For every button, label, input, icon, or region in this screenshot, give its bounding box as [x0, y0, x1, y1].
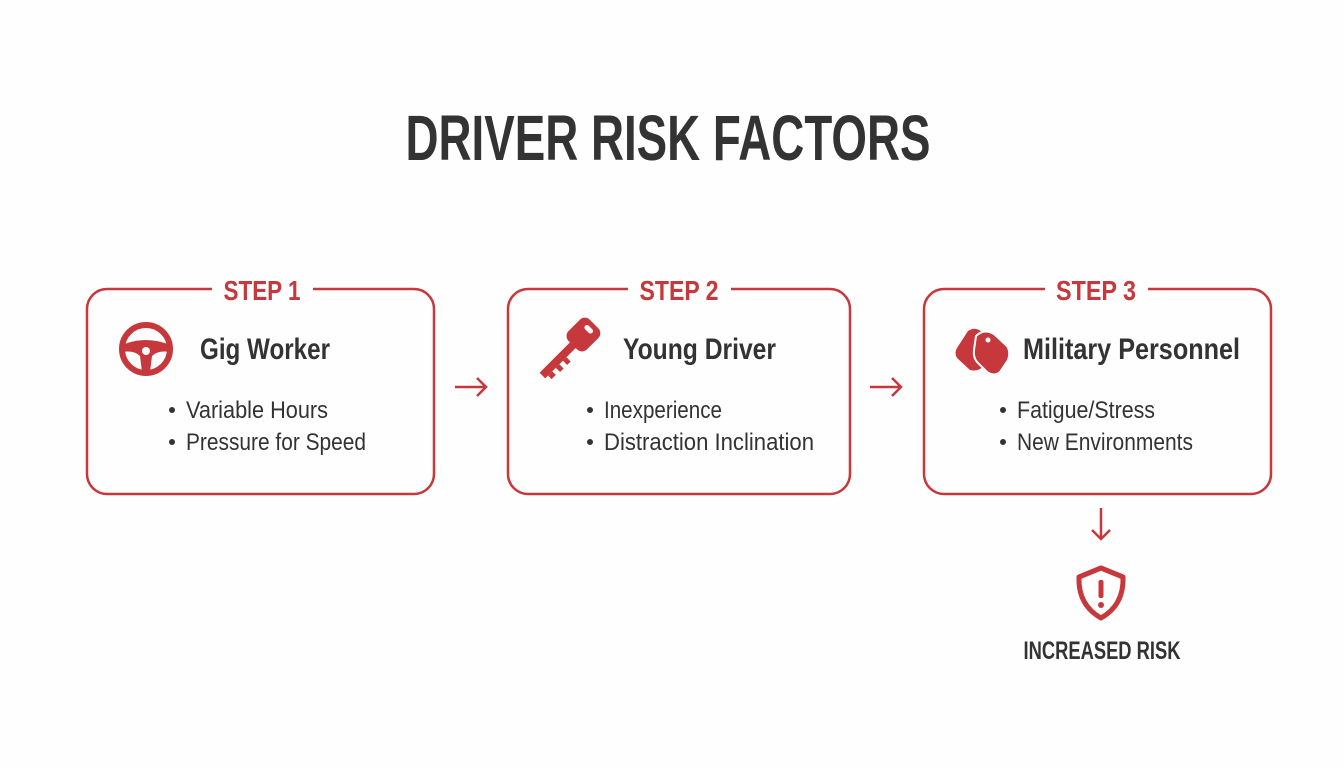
bullets: Distraction Inclination — [604, 429, 814, 456]
bullets — [587, 397, 814, 456]
panel: step 3 military personnel — [924, 275, 1271, 494]
panel: step 2 young driver — [508, 275, 850, 494]
heading: Military Personnel — [1023, 333, 1240, 366]
arrow down — [1092, 508, 1110, 539]
bullets: Variable Hours — [186, 397, 328, 424]
heading: Gig Worker — [200, 333, 330, 366]
heading: Young Driver — [623, 333, 776, 366]
outcome label: INCREASED RISK — [1024, 637, 1180, 665]
bullets — [1000, 397, 1193, 456]
icon: dog tags — [956, 329, 1009, 374]
arrow 1 — [455, 378, 486, 396]
bullets: Inexperience — [604, 397, 722, 424]
bullets: Pressure for Speed — [186, 429, 366, 456]
title: DRIVER RISK FACTORS — [406, 102, 930, 174]
bullets: Fatigue/Stress — [1017, 397, 1155, 424]
icon: shield warning — [1079, 568, 1123, 618]
step label 3: STEP 3 — [1056, 275, 1136, 306]
step label 1: STEP 1 — [224, 275, 300, 306]
bullets: New Environments — [1017, 429, 1193, 456]
bullets — [169, 397, 366, 456]
icon: key — [533, 315, 603, 385]
arrow 2 — [870, 378, 901, 396]
step label 2: STEP 2 — [640, 275, 718, 306]
icon: steering wheel — [122, 325, 170, 373]
panel: step 1 gig worker — [87, 275, 434, 494]
